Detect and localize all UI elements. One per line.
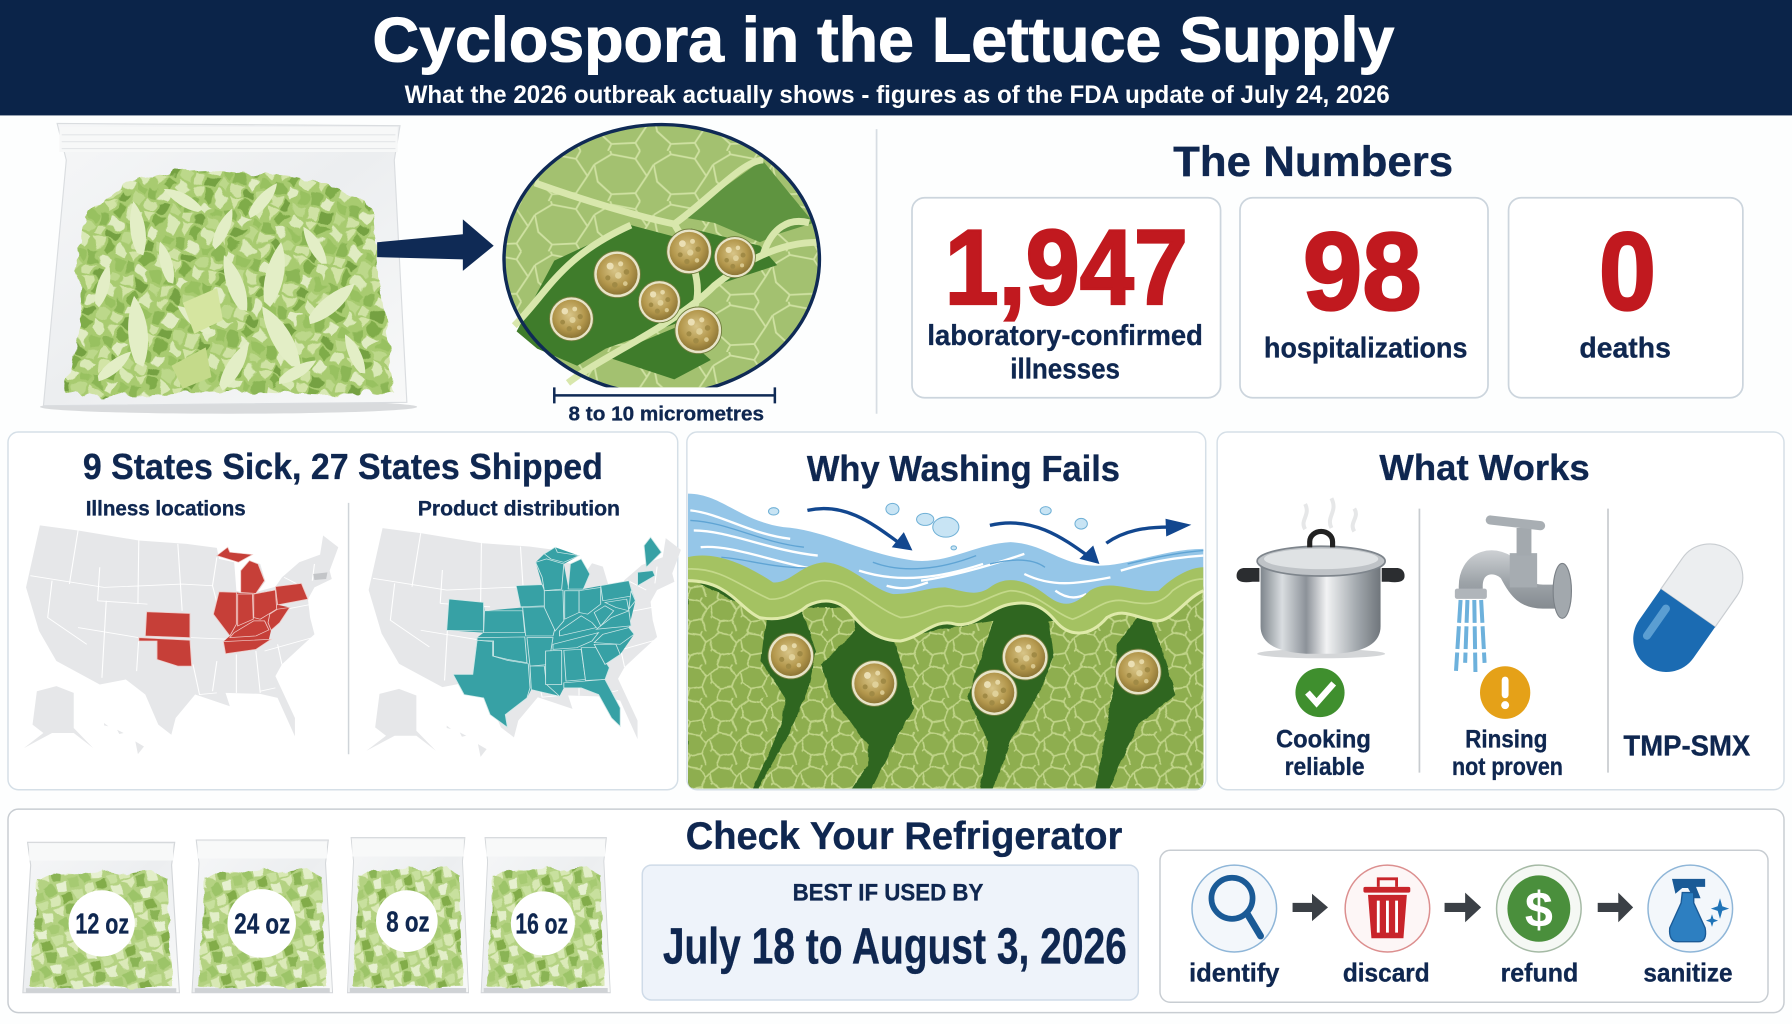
best-by date box: BEST IF USED BY (793, 880, 983, 907)
panel: what works (1217, 432, 1784, 790)
icon: refund dollar (1497, 865, 1581, 952)
leaf ridges (514, 160, 818, 383)
arrow (1293, 894, 1328, 921)
panel heading: Why Washing Fails (807, 448, 1120, 489)
oocysts in crevices (768, 633, 1161, 715)
stat card: illnesses: illnesses (1010, 353, 1120, 385)
label: sanitize: sanitize (1643, 958, 1733, 988)
title: Cyclospora in the Lettuce Supply (373, 6, 1394, 76)
stat card: hospitalizations (1240, 198, 1488, 398)
label: cooking: reliable (1285, 753, 1365, 781)
heading: check your refrigerator: Check Your Refrigerator (686, 815, 1122, 858)
header banner (0, 0, 1792, 115)
bubbles (768, 503, 1087, 550)
stat card: hospitalizations: 98 (1303, 211, 1422, 334)
heading: The Numbers: The Numbers (1173, 138, 1453, 185)
scale bar (554, 387, 775, 426)
icon: magnifier (1192, 865, 1277, 952)
panel: states map (8, 432, 681, 790)
stat card: deaths: deaths (1579, 333, 1671, 365)
map: product distribution (366, 528, 681, 757)
water flow arrows (807, 509, 1169, 557)
label: rinsing: not proven (1452, 753, 1563, 781)
recalled bag 24 oz: 24 oz (234, 909, 290, 941)
label: rinsing (1452, 725, 1563, 781)
recalled bag 16 oz (481, 838, 610, 993)
label: cooking: Cooking (1276, 725, 1371, 753)
label: cooking (1276, 725, 1371, 781)
recalled bag 12 oz (23, 842, 179, 993)
panel heading: 9 States Sick, 27 States Shipped (83, 446, 603, 487)
recalled bag 8 oz (347, 838, 469, 993)
best-by date box (642, 865, 1138, 1000)
stat card: illnesses: laboratory-confirmed (927, 320, 1203, 352)
recalled bag 24 oz (192, 840, 333, 993)
map: illness locations (24, 525, 338, 754)
illustration: magnified leaf with oocysts (504, 125, 819, 394)
icon: warning badge (1480, 666, 1530, 719)
icon: capsule (1620, 531, 1756, 685)
vertical divider (876, 129, 878, 414)
icon: cooking pot (1237, 498, 1405, 658)
label: rinsing: Rinsing (1465, 725, 1547, 753)
arrow (1598, 893, 1633, 922)
stat card: illnesses: 1,947 (945, 208, 1188, 327)
crevice base (688, 577, 1203, 792)
map label: illness: Illness locations (86, 495, 246, 520)
stat card: deaths: 0 (1599, 211, 1656, 334)
map label: distribution: Product distribution (418, 495, 620, 520)
arrow: zoom from bag to magnified view (377, 219, 494, 271)
arrow (1445, 893, 1481, 922)
label: identify: identify (1189, 958, 1280, 988)
leaf surface ridge (688, 555, 1203, 641)
stat card: illnesses (912, 198, 1221, 398)
icon: trash can (1345, 865, 1430, 952)
stat card: deaths (1509, 198, 1743, 398)
recalled bag 12 oz: 12 oz (75, 909, 129, 941)
subtitle: What the 2026 outbreak actually shows - figures as of the FDA update of July 24, 2026 (405, 82, 1390, 109)
icon: faucet (1455, 520, 1571, 672)
icon: spray bottle (1648, 865, 1733, 952)
recalled bag 16 oz: 16 oz (515, 909, 568, 941)
icon: refund dollar: $ (1525, 881, 1553, 938)
scale label: 8 to 10 micrometres (569, 403, 764, 426)
icon: green check badge (1295, 668, 1345, 717)
action steps box (1160, 850, 1768, 1002)
label: refund: refund (1501, 958, 1578, 988)
water layer (688, 494, 1204, 604)
illustration: bag of shredded lettuce (40, 123, 417, 414)
recalled bag 8 oz: 8 oz (386, 906, 430, 938)
illustration: water over leaf crevices (688, 494, 1207, 793)
leaf columns (688, 577, 1207, 793)
label: discard: discard (1343, 958, 1430, 988)
best-by date box: July 18 to August 3, 2026 (663, 916, 1127, 974)
panel: check your refrigerator (8, 809, 1784, 1013)
panel heading: What Works (1379, 447, 1590, 488)
leaf crevices (517, 160, 814, 379)
panel: why washing fails (687, 432, 1207, 793)
label: TMP-SMX: TMP-SMX (1623, 730, 1750, 762)
stat card: hospitalizations: hospitalizations (1264, 333, 1467, 365)
